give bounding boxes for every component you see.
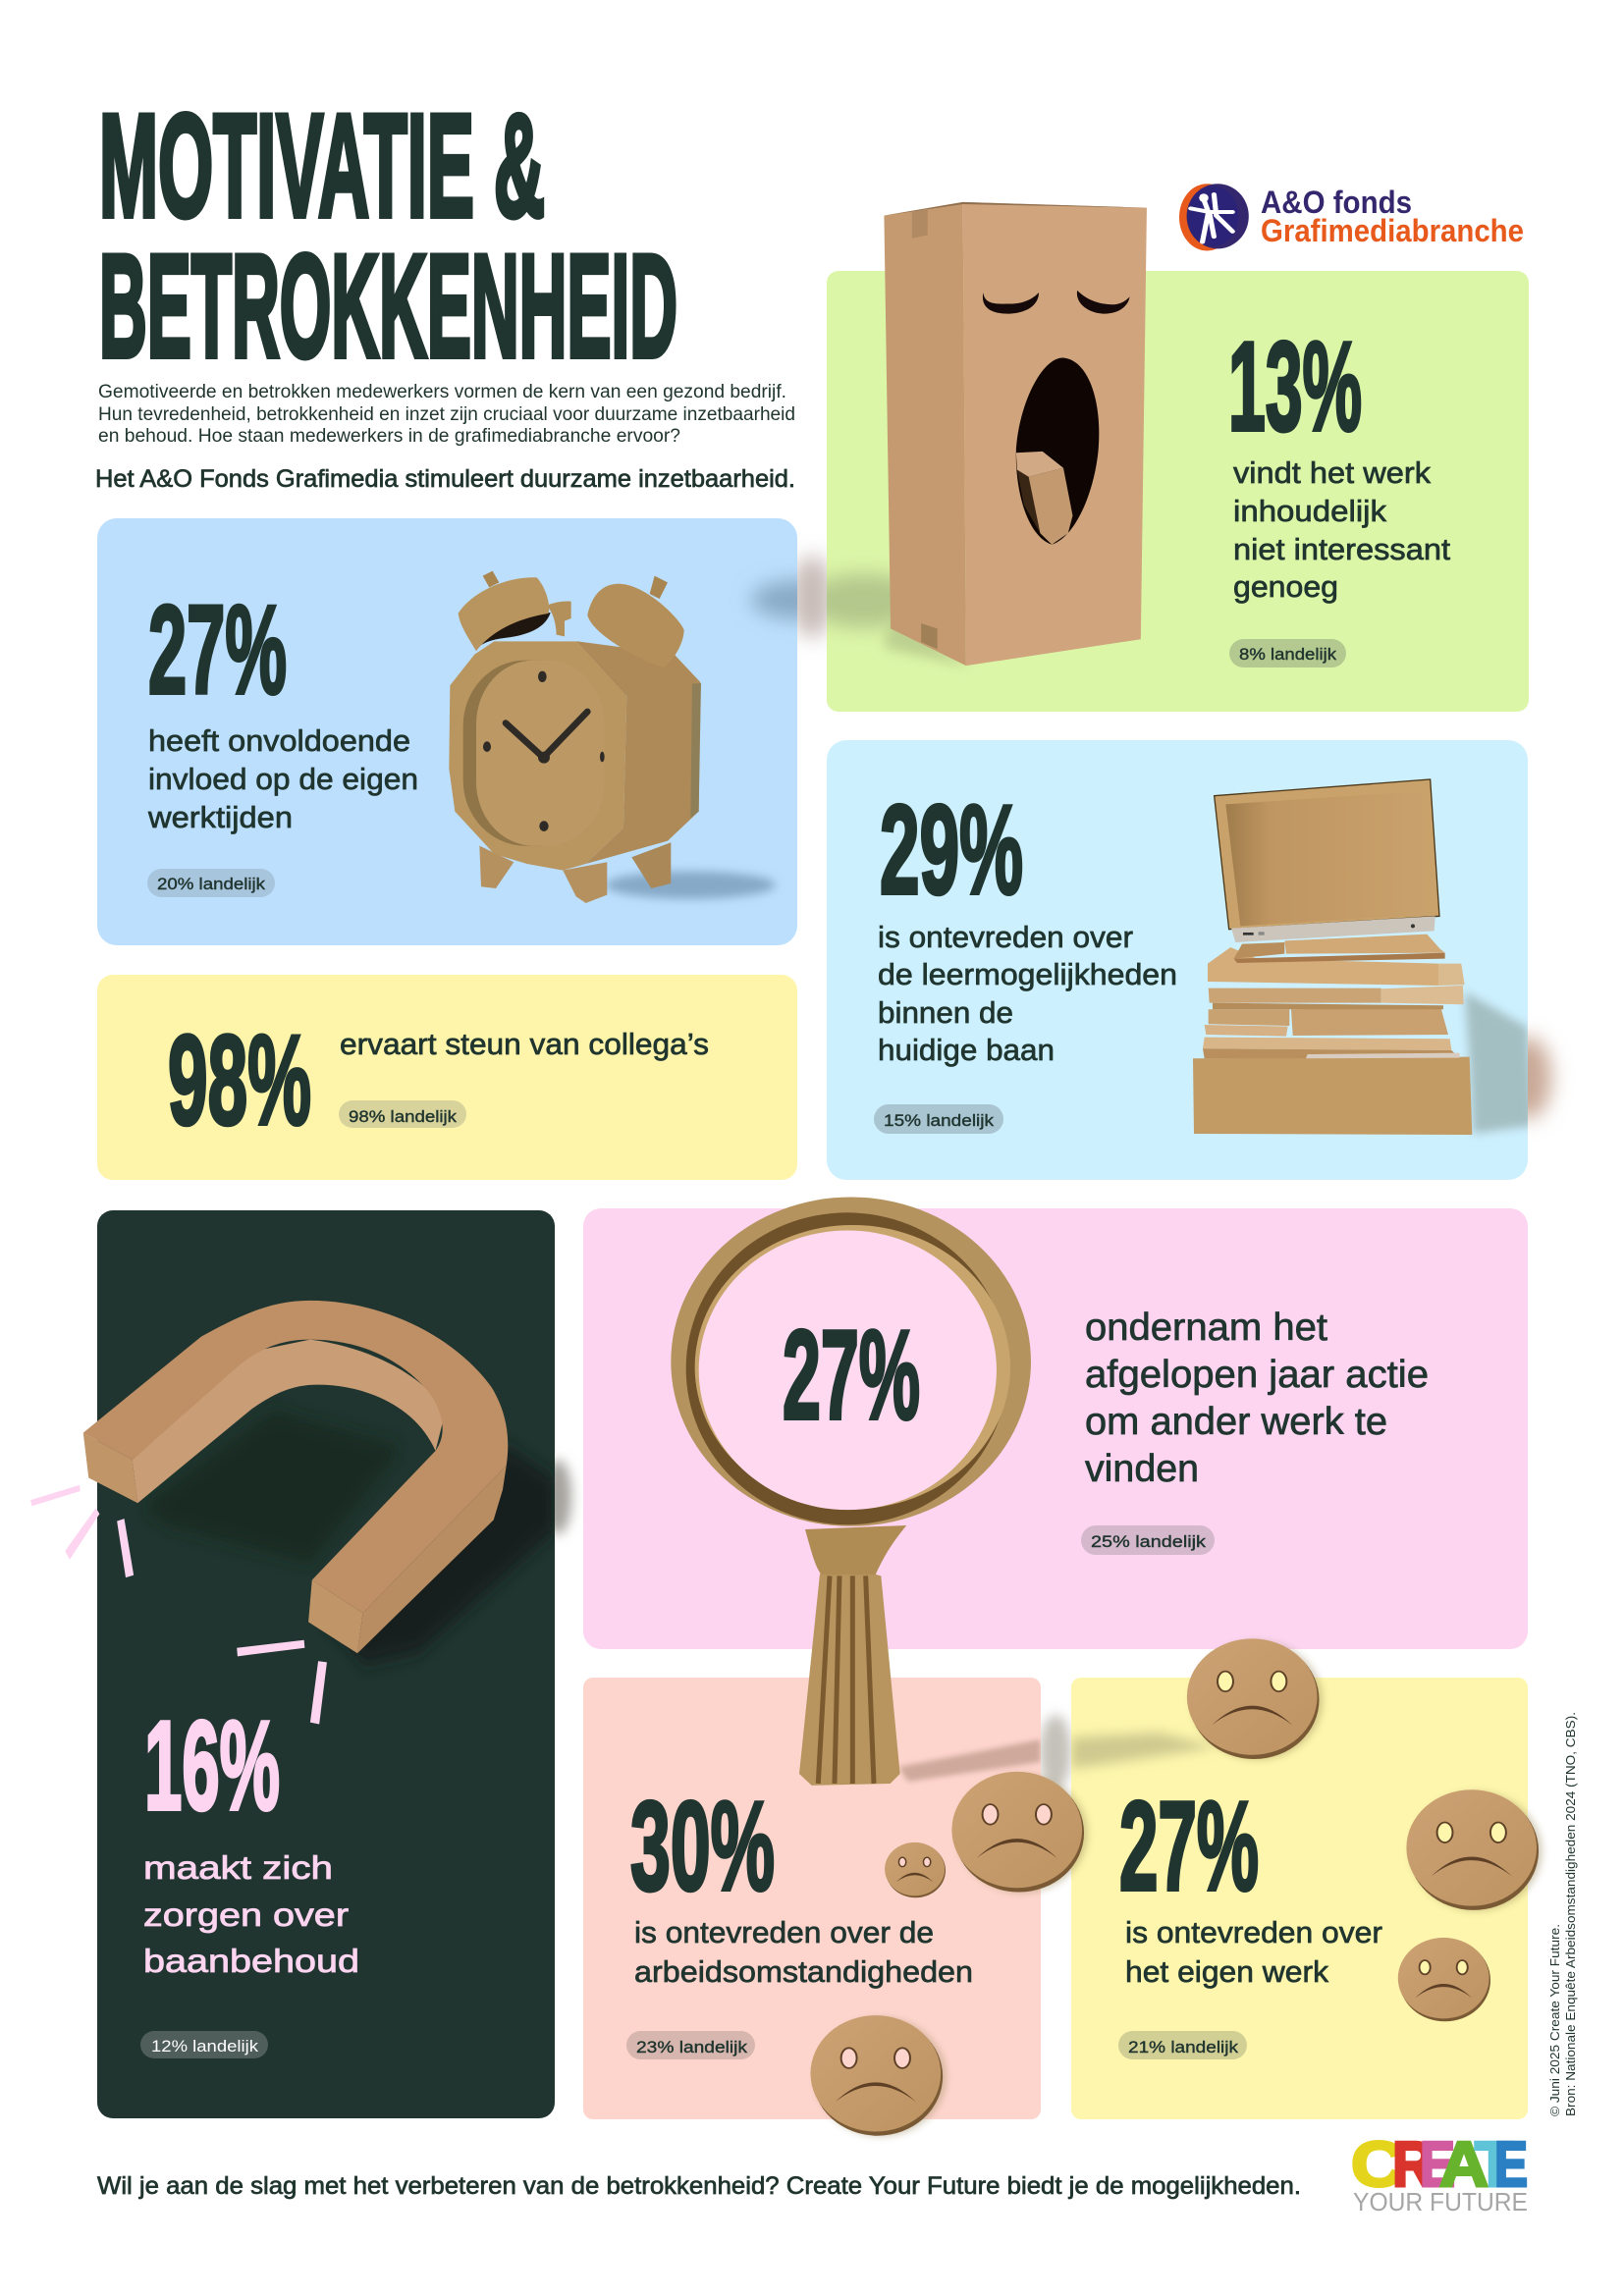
panel: steun van collega's — [97, 975, 797, 1180]
description: inhoudelijk — [1233, 494, 1387, 528]
title — [99, 83, 677, 388]
description — [634, 1915, 973, 1989]
icon: sad face small — [885, 1842, 946, 1897]
intro text — [98, 382, 795, 447]
title: MOTIVATIE & — [99, 83, 545, 247]
logo: Create Your Future: YOUR FUTURE — [1353, 2187, 1528, 2216]
stat 16%: 16% — [144, 1695, 280, 1837]
panel: arbeidsomstandigheden — [583, 1678, 1041, 2119]
logo: A&O fonds Grafimediabranche: Grafimediabranche — [1261, 213, 1524, 248]
logo: A&O fonds Grafimediabranche: A&O fonds — [1261, 185, 1412, 220]
description: vindt het werk — [1233, 455, 1432, 490]
intro text: en behoud. Hoe staan medewerkers in de grafimediabranche ervoor? — [98, 426, 680, 447]
icon: sad face top — [1187, 1638, 1323, 1760]
description: is ontevreden over de — [634, 1915, 934, 1949]
description — [143, 1849, 359, 1979]
national badge: 21% landelijk — [1128, 2038, 1239, 2056]
national badge: 23% landelijk — [636, 2038, 748, 2056]
description: maakt zich — [143, 1849, 333, 1886]
national badge — [140, 2031, 268, 2058]
national badge — [874, 1104, 1003, 1134]
national badge — [626, 2031, 755, 2059]
panel: werktijden — [97, 518, 849, 945]
description — [147, 723, 418, 834]
icon: stack of boxes and books — [1193, 779, 1472, 1135]
panel: leermogelijkheden — [827, 740, 1535, 1180]
description: is ontevreden over — [878, 920, 1133, 954]
description: de leermogelijkheden — [878, 957, 1177, 991]
logo: A&O fonds Grafimediabranche — [1179, 184, 1524, 251]
description: werktijden — [147, 800, 293, 834]
panel: ander werk — [583, 1197, 1528, 1786]
icon: sad face lower right — [1398, 1938, 1490, 2021]
source note: Bron: Nationale Enquête Arbeidsomstandigheden 2024 (TNO, CBS). — [1563, 1712, 1578, 2116]
icon: yawning cardboard box — [884, 202, 1147, 666]
icon: sad face middle — [951, 1772, 1087, 1893]
logo: Create Your Future: T — [1475, 2128, 1514, 2200]
source note: © Juni 2025 Create Your Future. — [1547, 1924, 1562, 2116]
national badge: 20% landelijk — [157, 875, 266, 893]
national badge: 98% landelijk — [349, 1107, 458, 1126]
national badge: 25% landelijk — [1091, 1532, 1207, 1551]
logo: Create Your Future: C — [1351, 2128, 1404, 2200]
logo: Create Your Future — [1351, 2128, 1528, 2216]
description: afgelopen jaar actie — [1085, 1354, 1429, 1396]
text: BETROKKENHEID — [99, 224, 677, 388]
national badge — [1229, 639, 1346, 667]
national badge: 15% landelijk — [884, 1111, 995, 1130]
description: is ontevreden over — [1125, 1915, 1382, 1949]
stat 27%: 27% — [783, 1305, 920, 1446]
description: heeft onvoldoende — [148, 723, 410, 758]
panel: baanbehoud — [30, 1210, 555, 2118]
description: huidige baan — [878, 1033, 1055, 1067]
description: baanbehoud — [143, 1943, 359, 1979]
description: niet interessant — [1233, 532, 1450, 566]
description: arbeidsomstandigheden — [634, 1954, 973, 1989]
description: invloed op de eigen — [148, 762, 418, 796]
description: ondernam het — [1085, 1307, 1327, 1349]
description: om ander werk te — [1085, 1401, 1387, 1443]
description — [878, 920, 1177, 1067]
subheading: Het A&O Fonds Grafimedia stimuleert duurzame inzetbaarheid. — [95, 465, 795, 493]
national badge — [1118, 2031, 1247, 2059]
source note — [1547, 1712, 1578, 2116]
icon: cardboard alarm clock — [449, 571, 776, 903]
icon: cardboard magnet with sparks — [30, 1301, 508, 1724]
national badge — [1081, 1525, 1215, 1555]
stat 13%: 13% — [1228, 316, 1362, 457]
logo: Create Your Future: A — [1439, 2128, 1489, 2200]
description: binnen de — [878, 995, 1013, 1030]
description: zorgen over — [143, 1896, 349, 1933]
icon: cardboard magnifying glass — [671, 1197, 1031, 1786]
description — [1233, 455, 1450, 604]
stat 98%: 98% — [168, 1008, 311, 1151]
description: het eigen werk — [1125, 1954, 1329, 1989]
national badge — [339, 1100, 466, 1128]
icon: sad face bottom — [810, 2015, 946, 2136]
intro text: Hun tevredenheid, betrokkenheid en inzet zijn cruciaal voor duurzame inzetbaarheid — [98, 404, 795, 425]
logo: Create Your Future: E — [1420, 2128, 1455, 2200]
icon: sad face right — [1406, 1789, 1542, 1911]
national badge: 12% landelijk — [151, 2037, 259, 2056]
panel: eigen werk — [1071, 1678, 1528, 2119]
logo: Create Your Future: E — [1494, 2128, 1528, 2200]
description: ervaart steun van collega’s — [340, 1027, 709, 1061]
description — [1125, 1915, 1382, 1989]
icon: logo emblem — [1179, 184, 1249, 251]
stat 27%: 27% — [1119, 1776, 1259, 1917]
stat 29%: 29% — [880, 779, 1023, 921]
logo: Create Your Future: R — [1392, 2128, 1434, 2200]
panel: inhoudelijk werk — [805, 202, 1529, 712]
intro text: Gemotiveerde en betrokken medewerkers vormen de kern van een gezond bedrijf. — [98, 382, 786, 402]
national badge — [147, 869, 275, 897]
description: genoeg — [1233, 569, 1338, 604]
stat 27%: 27% — [148, 580, 287, 721]
description: vinden — [1085, 1448, 1199, 1490]
national badge: 8% landelijk — [1239, 645, 1337, 664]
stat 30%: 30% — [630, 1776, 775, 1917]
description — [1085, 1307, 1429, 1490]
footer call to action: Wil je aan de slag met het verbeteren van de betrokkenheid? Create Your Future biedt je de mogelijkheden. — [97, 2172, 1301, 2200]
